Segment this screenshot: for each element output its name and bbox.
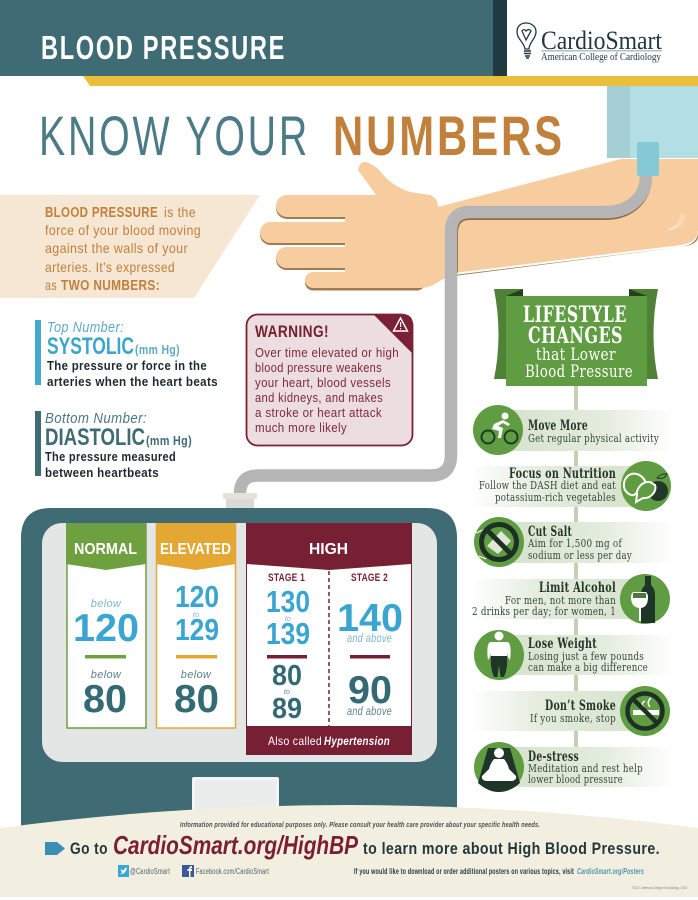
chart column: normal: NORMAL [74,541,137,558]
panel: systolic: SYSTOLIC [47,333,134,360]
callout: warning: your heart, blood vessels [255,375,391,390]
callout: warning: much more likely [255,420,347,435]
panel: diastolic [35,410,192,480]
callout: warning: WARNING! [255,323,329,341]
chart column: elevated: 80 [174,678,219,721]
yellow stripe [83,76,698,86]
panel: systolic: The pressure or force in the [47,359,207,373]
call to action: CardioSmart.org/HighBP [113,830,359,860]
icon: no smoking [628,694,662,728]
connector line for lifestyle list [574,386,578,748]
main title: KNOW YOUR [39,104,310,167]
stage 2: 90 [348,669,392,712]
item: move more: Move More [528,418,588,434]
hypertension note: Hypertension [324,734,390,748]
item: focus on nutrition: Focus on Nutrition [509,466,616,482]
item: cut salt: Aim for 1,500 mg of [527,536,622,550]
item: don't smoke [470,686,670,736]
chart column: normal: below [91,598,122,610]
item: focus on nutrition: Follow the DASH diet and eat [479,478,616,492]
panel: blood pressure definition: BLOOD PRESSURE [45,205,158,221]
stage 2: 140 [337,597,403,640]
item: focus on nutrition [470,461,671,511]
illustration: arm and hand [260,159,698,290]
panel: blood pressure definition: force of your blood moving [45,222,201,238]
icon: person [487,632,511,677]
item: de-stress: Meditation and rest help [528,761,643,775]
item: cut salt [474,517,674,567]
panel: diastolic: (mm Hg) [146,434,192,448]
item: de-stress [474,742,674,792]
item: de-stress: De-stress [528,749,579,765]
main title: NUMBERS [333,104,565,167]
stage 2: STAGE 2 [351,572,388,584]
chart column: normal [66,523,146,728]
item: de-stress: lower blood pressure [528,772,623,786]
stage 1: 130 [266,584,310,619]
stage 2: and above [347,631,392,645]
icon: no salt [476,524,516,560]
panel: systolic [35,319,218,389]
tube connector [223,493,257,509]
callout: warning: Over time elevated or high [255,345,399,360]
logo: CardioSmart: CardioSmart [541,26,663,55]
banner: lifestyle changes: that Lower [536,345,616,365]
monitor [21,508,457,838]
chart column: elevated: to [193,612,199,619]
chart column: high: HIGH [309,541,348,558]
stage 1: to [285,616,291,623]
logo: CardioSmart: American College of Cardiology [541,52,661,63]
panel: blood pressure definition: is the [164,204,196,220]
banner: lifestyle changes: Blood Pressure [525,362,633,382]
panel: blood pressure definition [0,195,260,298]
panel: diastolic: DIASTOLIC [45,424,145,451]
finger shadows [260,197,698,290]
social links: @CardioSmart [130,867,170,876]
icon: vegetables and apple [624,474,668,502]
stage 1 [266,572,310,725]
social links: Facebook.com/CardioSmart [196,867,269,876]
footer [0,805,698,897]
monitor stand [192,777,279,837]
chart column: elevated: below [181,669,212,681]
item: don't smoke: Don’t Smoke [545,698,616,714]
posters note: If you would like to download or order additional posters on various topics, visit [354,867,574,876]
chart column: normal: 80 [83,678,127,721]
icon: wine bottle and glass [631,576,655,623]
icon: twitter [118,865,129,877]
cuff strap [637,142,659,176]
panel: diastolic: Bottom Number: [45,410,147,427]
panel: systolic: arteries when the heart beats [47,375,218,389]
icon: facebook [182,865,194,877]
chart column: elevated: 120 [175,579,219,614]
callout: warning: and kidneys, and makes [255,390,383,405]
hypertension note: Also called [268,734,322,748]
banner: lifestyle changes [494,289,658,386]
icon: arrow [45,842,65,855]
item: limit alcohol [470,574,670,624]
stage 1: 139 [266,616,310,651]
item: cut salt: Cut Salt [528,524,572,540]
illustration: tube [223,142,659,509]
stage 1: 89 [272,693,302,725]
item: lose weight: Lose Weight [528,636,597,652]
item: limit alcohol: For men, not more than [505,593,616,607]
stage 2: and above [347,704,392,718]
item: lose weight [474,630,674,680]
panel: systolic: (mm Hg) [135,343,180,357]
callout: warning: a stroke or heart attack [255,405,382,420]
stage 1: STAGE 1 [268,572,305,584]
banner: lifestyle changes: CHANGES [528,323,623,349]
item: limit alcohol: 2 drinks per day; for women, 1 [472,604,616,618]
social links [118,865,269,877]
header band [0,0,507,76]
illustration: pressure cuff [607,86,698,158]
call to action [45,830,660,860]
header title: BLOOD PRESSURE [41,29,286,66]
icon: cyclist [482,412,518,444]
stage 2 [337,572,403,718]
call to action: Go to [70,839,108,858]
panel: diastolic: between heartbeats [45,466,159,480]
item: cut salt: sodium or less per day [528,548,632,562]
hypertension note [268,734,390,748]
panel: blood pressure definition: arteries. It’s expressed [45,259,175,275]
stage 1: 80 [272,660,302,692]
item: lose weight: can make a big difference [528,660,648,674]
panel: blood pressure definition: as [45,277,57,293]
callout: warning: blood pressure weakens [255,360,382,375]
icon: light bulb with heart [517,23,536,58]
item: don't smoke: If you smoke, stop [530,711,616,725]
stage 1: to [284,689,290,696]
item: limit alcohol: Limit Alcohol [539,580,616,596]
logo: CardioSmart [517,23,663,63]
item: move more [473,405,673,455]
chart column: normal: 120 [73,607,139,650]
monitor screen [42,523,437,762]
panel: blood pressure definition: against the walls of your [45,240,188,256]
chart column: elevated [156,523,236,728]
disclaimer: Information provided for educational purposes only. Please consult your health care provider about your specific health needs. [180,820,540,829]
item: focus on nutrition: potassium-rich vegetables [495,490,616,504]
icon: meditating figure [478,748,520,792]
panel: diastolic: The pressure measured [45,450,176,464]
chart column: normal: below [91,669,122,681]
posters note: CardioSmart.org/Posters [577,867,644,876]
panel: blood pressure definition: TWO NUMBERS: [61,278,160,294]
panel: systolic: Top Number: [47,319,124,336]
icon: warning triangle [394,318,408,331]
callout: warning [246,314,413,446]
chart column: elevated: 129 [175,612,219,647]
chart column: elevated: ELEVATED [160,541,231,558]
chart column: high [246,523,412,755]
banner: lifestyle changes: LIFESTYLE [523,302,627,328]
item: lose weight: Losing just a few pounds [528,649,644,663]
